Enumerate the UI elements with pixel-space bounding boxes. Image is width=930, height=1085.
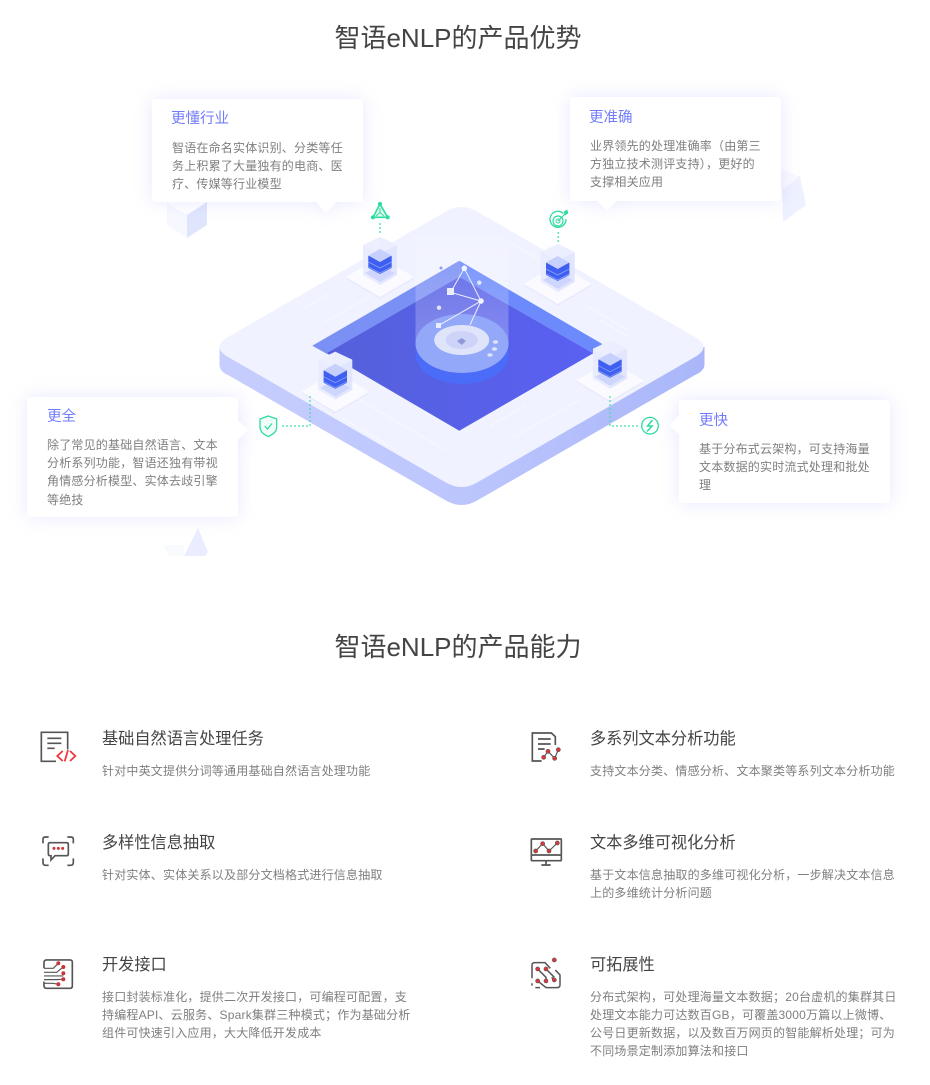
icon: chat bubble — [43, 837, 73, 865]
decorative cube: bottom left — [163, 528, 208, 556]
feature heading: 多系列文本分析功能 — [590, 730, 736, 748]
callout body: 等绝技 — [47, 493, 84, 507]
callout body: 支撑相关应用 — [590, 175, 663, 189]
callout body — [590, 139, 761, 189]
platform base — [220, 207, 704, 505]
callout body — [47, 438, 218, 507]
decorative cube: top right — [770, 168, 806, 222]
callout body: 文本数据的实时流式处理和批处 — [699, 460, 870, 474]
feature text: 分布式架构，可处理海量文本数据；20台虚机的集群其日 — [590, 990, 897, 1004]
icon: shield — [260, 416, 277, 436]
feature text: 上的多维统计分析问题 — [590, 886, 712, 900]
callout body — [699, 442, 870, 492]
icon: target — [550, 210, 568, 227]
callout: coverage — [27, 397, 238, 517]
icon: document with chart — [532, 733, 560, 761]
server: bottom left — [301, 352, 369, 414]
feature: development interface — [102, 956, 410, 1040]
feature text: 基于文本信息抽取的多维可视化分析，一步解决文本信息 — [590, 868, 895, 882]
callout body: 疗、传媒等行业模型 — [172, 177, 282, 191]
callout body: 方独立技术测评支持），更好的 — [590, 157, 755, 171]
callout heading: 更懂行业 — [171, 111, 229, 127]
icon: extensible circuit — [532, 958, 560, 988]
feature text — [590, 990, 897, 1058]
feature text: 处理文本能力可达数百GB，可覆盖3000万篇以上微博、 — [590, 1008, 891, 1022]
connector: bottom right — [610, 396, 640, 426]
node network — [436, 266, 484, 328]
icon: circuit interface — [44, 960, 72, 988]
title: product advantages: 智语eNLP的产品优势 — [334, 23, 582, 53]
callout: accuracy — [570, 97, 781, 201]
icon: lightning bolt — [642, 417, 658, 434]
feature text: 支持文本分类、情感分析、文本聚类等系列文本分析功能 — [590, 764, 895, 778]
feature text — [102, 990, 410, 1040]
feature: text analysis — [590, 730, 895, 778]
callout body: 分析系列功能，智语还独有带视 — [47, 456, 218, 470]
feature text — [590, 868, 895, 900]
feature text: 持编程API、云服务、Spark集群三种模式；作为基础分析 — [102, 1008, 410, 1022]
connector: top right — [557, 232, 559, 243]
server: top left — [346, 237, 414, 299]
connector: top left — [379, 223, 381, 235]
decorative cube: top left — [167, 202, 207, 238]
callout body: 基于分布式云架构，可支持海量 — [699, 442, 870, 456]
callout body: 业界领先的处理准确率（由第三 — [590, 139, 761, 153]
feature: scalability — [590, 956, 897, 1058]
feature: multi-dimensional visualization — [590, 834, 895, 900]
title: product capabilities: 智语eNLP的产品能力 — [334, 632, 582, 662]
callout: speed — [679, 400, 890, 503]
feature heading: 文本多维可视化分析 — [590, 834, 736, 852]
central pit — [312, 261, 602, 431]
callout: industry — [152, 99, 363, 202]
data cylinder — [416, 235, 508, 384]
callout body: 务上积累了大量独有的电商、医 — [172, 159, 343, 173]
icon: document with code — [41, 732, 75, 761]
feature text: 接口封装标准化，提供二次开发接口，可编程可配置，支 — [102, 990, 407, 1004]
feature heading: 可拓展性 — [590, 956, 655, 974]
callout heading: 更快 — [699, 413, 728, 429]
feature text: 公号日更新数据，以及数百万网页的智能解析处理；可为 — [590, 1026, 895, 1040]
callout heading: 更准确 — [589, 110, 632, 126]
feature: basic NLP tasks — [102, 730, 370, 778]
callout body — [172, 141, 343, 191]
icon: triangle network — [372, 203, 389, 219]
feature heading: 基础自然语言处理任务 — [102, 730, 264, 748]
feature text: 不同场景定制添加算法和接口 — [590, 1044, 749, 1058]
server: top right — [524, 244, 592, 306]
feature heading: 开发接口 — [102, 956, 167, 974]
feature text: 针对实体、实体关系以及部分文档格式进行信息抽取 — [102, 868, 383, 882]
callout body: 除了常见的基础自然语言、文本 — [47, 438, 218, 452]
server: bottom right — [576, 341, 644, 403]
connector: bottom left — [280, 396, 310, 426]
callout body: 角情感分析模型、实体去歧引擎 — [47, 474, 218, 488]
icon: monitor with chart — [531, 839, 561, 865]
callout heading: 更全 — [47, 409, 76, 425]
feature text: 针对中英文提供分词等通用基础自然语言处理功能 — [102, 764, 370, 778]
feature: information extraction — [102, 834, 383, 882]
callout body: 智语在命名实体识别、分类等任 — [172, 141, 343, 155]
feature heading: 多样性信息抽取 — [102, 834, 215, 852]
callout body: 理 — [699, 478, 711, 492]
feature text: 组件可快速引入应用，大大降低开发成本 — [102, 1026, 322, 1040]
